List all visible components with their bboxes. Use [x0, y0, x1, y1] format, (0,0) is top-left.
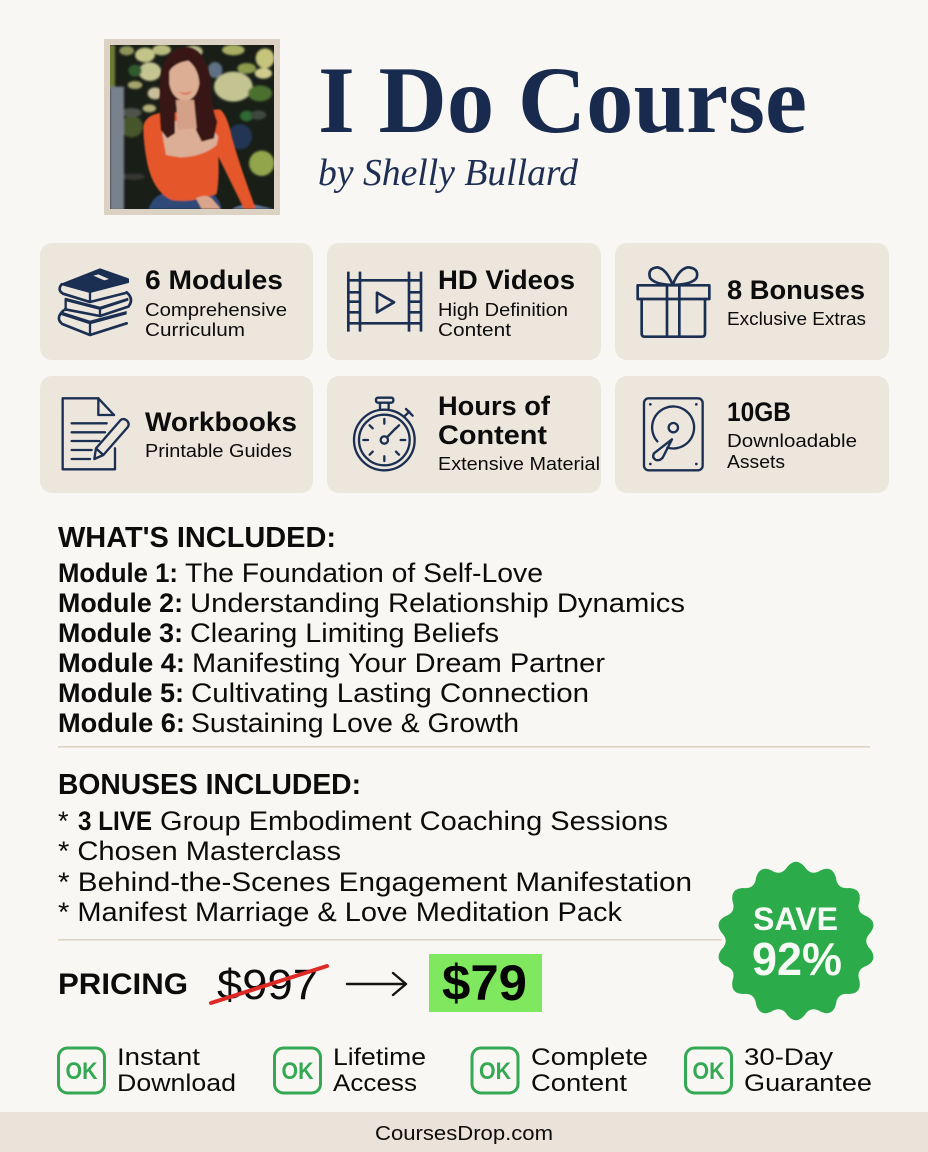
feature: 30-Day Guarantee	[686, 1044, 872, 1097]
description: Extensive Material: Extensive Material	[438, 453, 600, 474]
module list: Sustaining Love & Growth	[191, 708, 519, 738]
module list: Module 5:	[58, 678, 184, 708]
savings badge: SAVE	[753, 901, 838, 937]
savings badge: 92%	[752, 933, 842, 985]
panel: 10GB	[615, 376, 889, 493]
module list: Clearing Limiting Beliefs	[190, 618, 499, 648]
bonus list: * Behind-the-Scenes Engagement Manifestation	[58, 867, 692, 897]
description: Comprehensive Curriculum	[145, 299, 287, 340]
feature: Instant Download	[58, 1044, 236, 1097]
feature: Complete Content: OK	[479, 1058, 512, 1085]
panel: 6 Modules	[40, 243, 313, 360]
feature: Lifetime Access: OK	[282, 1058, 314, 1085]
icon: gift box	[638, 267, 709, 337]
icon: film strip	[348, 272, 421, 332]
icon: stopwatch	[354, 398, 415, 470]
feature: Complete Content: Content	[531, 1070, 627, 1097]
footer bar	[0, 1112, 928, 1152]
description: Comprehensive Curriculum: Curriculum	[145, 319, 245, 340]
label: HD Videos: HD Videos	[438, 265, 575, 295]
feature: Lifetime Access: Access	[333, 1070, 417, 1097]
heading: Bonuses included: BONUSES INCLUDED:	[58, 769, 361, 801]
panel: HD Videos	[327, 243, 601, 360]
label: Hours of Content: Content	[438, 420, 547, 450]
label: Workbooks: Workbooks	[145, 407, 297, 437]
feature: 30-Day Guarantee: Guarantee	[744, 1070, 872, 1097]
label: 6 Modules: 6 Modules	[145, 265, 283, 295]
old price struck through: $997	[217, 961, 318, 1009]
footer bar: CoursesDrop.com	[375, 1123, 553, 1145]
module list: Module 4:	[58, 648, 185, 678]
panel: Workbooks	[40, 376, 313, 493]
label: 8 Bonuses: 8 Bonuses	[727, 275, 865, 305]
pricing row	[58, 954, 542, 1012]
icon: stacked books	[59, 269, 131, 335]
feature: Instant Download: Instant	[117, 1044, 200, 1071]
feature: Lifetime Access: Lifetime	[333, 1044, 426, 1071]
panel: 8 Bonuses	[615, 243, 889, 360]
bonus list: Group Embodiment Coaching Sessions	[160, 806, 668, 836]
module list: Module 2:	[58, 588, 183, 618]
label: Hours of Content	[438, 391, 551, 450]
bonus list: * Manifest Marriage & Love Meditation Pack	[58, 897, 623, 927]
module list	[58, 558, 685, 738]
panel: Hours of Content	[327, 376, 601, 493]
description: High Definition Content: High Definition	[438, 299, 568, 320]
new price: $79	[442, 955, 527, 1011]
label: Hours of Content: Hours of	[438, 391, 551, 421]
module list: Manifesting Your Dream Partner	[192, 648, 605, 678]
bonus list: 3 LIVE	[78, 806, 152, 836]
arrow	[347, 973, 406, 995]
feature: Complete Content	[472, 1044, 648, 1097]
feature: Instant Download: Download	[117, 1070, 236, 1097]
subtitle: by Shelly Bullard	[318, 152, 579, 194]
module list: Understanding Relationship Dynamics	[190, 588, 685, 618]
feature: Complete Content: Complete	[531, 1044, 648, 1071]
label: 10GB: 10GB	[727, 397, 791, 427]
feature: 30-Day Guarantee: 30-Day	[744, 1044, 834, 1071]
module list: Module 1:	[58, 558, 178, 588]
bonus list: *	[58, 806, 69, 836]
feature: 30-Day Guarantee: OK	[692, 1058, 725, 1085]
savings badge	[719, 862, 873, 1020]
heading: What's included: WHAT'S INCLUDED:	[58, 522, 336, 554]
feature: Lifetime Access	[274, 1044, 426, 1097]
title: I Do Course	[318, 47, 807, 153]
icon: hard drive	[644, 398, 703, 470]
description: Printable Guides: Printable Guides	[145, 440, 292, 461]
description: High Definition Content	[438, 299, 568, 340]
module list: The Foundation of Self-Love	[185, 558, 543, 588]
description: Comprehensive Curriculum: Comprehensive	[145, 299, 287, 320]
description: High Definition Content: Content	[438, 319, 511, 340]
module list: Module 3:	[58, 618, 183, 648]
description: Downloadable Assets: Downloadable	[727, 430, 857, 451]
module list: Cultivating Lasting Connection	[191, 678, 589, 708]
bonus list	[58, 806, 692, 927]
label: pricing: PRICING	[58, 968, 188, 1001]
icon: document and pencil	[63, 398, 129, 469]
description: Downloadable Assets	[727, 430, 857, 472]
portrait photo	[104, 39, 280, 215]
description: Exclusive Extras: Exclusive Extras	[727, 308, 866, 329]
guarantee row	[58, 1044, 872, 1097]
bonus list: * Chosen Masterclass	[58, 836, 341, 866]
feature: Instant Download: OK	[66, 1058, 98, 1085]
description: Downloadable Assets: Assets	[727, 451, 785, 472]
module list: Module 6:	[58, 708, 185, 738]
